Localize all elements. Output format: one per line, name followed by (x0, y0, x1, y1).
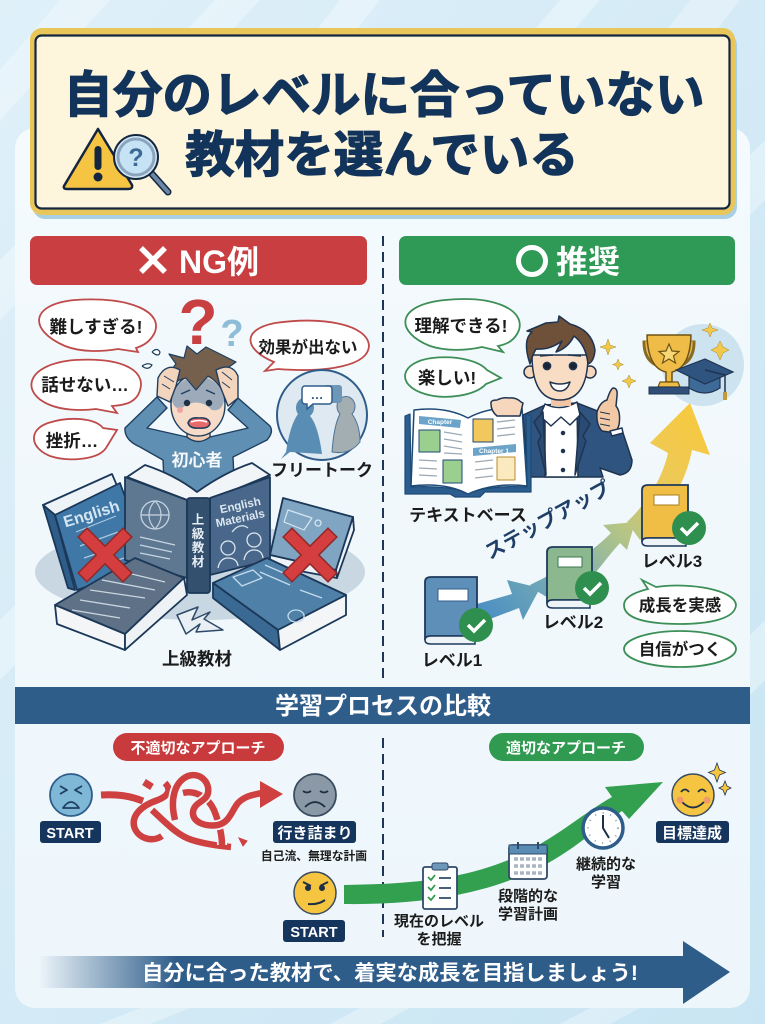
sparkles (708, 763, 731, 795)
book: open textbook: Chapter 1 (479, 448, 509, 455)
label: free talk: フリートーク (271, 461, 373, 480)
book: open textbook: Chapter (428, 419, 453, 426)
step-up arrow (477, 403, 710, 624)
illustration: free talk circle (277, 370, 367, 460)
person: confused beginner (125, 346, 271, 500)
speech bubble: confidence (624, 631, 736, 667)
title text (63, 68, 705, 183)
icon: question marks: ? (178, 286, 218, 358)
label: assess current level: 現在のレベル (394, 913, 484, 930)
book: large open advanced book: 教 (192, 540, 205, 555)
icon: calendar (509, 842, 547, 879)
divider: upper (382, 236, 384, 680)
title text: 自分のレベルに合っていない (63, 68, 705, 123)
label: dead end (273, 821, 356, 843)
pill: inappropriate approach: 不適切なアプローチ (130, 739, 266, 757)
divider: lower (382, 738, 384, 937)
panel: NG heading (30, 236, 367, 285)
speech bubble: understand (405, 299, 520, 352)
label: start: START (46, 826, 94, 842)
call to action arrow (38, 941, 730, 1004)
icon: red cross right (292, 537, 328, 573)
pill: inappropriate approach (113, 733, 284, 761)
speech bubble: confidence: 自信がつく (639, 639, 721, 659)
label: level 2: レベル2 (543, 613, 603, 632)
book: level 3 (642, 485, 706, 546)
face: sad (294, 774, 336, 816)
speech bubble: no effect: 効果が出ない (258, 337, 358, 357)
icon: question marks: ? (220, 313, 244, 355)
book: large open advanced book: 上 (192, 513, 204, 527)
book: large open advanced book: English (219, 496, 262, 516)
speech bubble: frustration (34, 419, 117, 459)
label: dead end: 行き詰まり (277, 825, 353, 842)
pill: appropriate approach: 適切なアプローチ (506, 739, 626, 757)
panel: NG illustration (31, 286, 373, 669)
speech bubble: no effect (250, 321, 369, 371)
caption: self-taught: 自己流、無理な計画 (261, 849, 367, 863)
label: stepwise study plan (498, 887, 558, 923)
shadow under books (35, 524, 365, 620)
pill: appropriate approach (489, 733, 644, 761)
book: large open advanced book: Materials (215, 508, 266, 530)
label: text based: テキストベース (409, 506, 527, 525)
person: confused beginner: 初心者 (172, 451, 222, 470)
speech bubble: too hard (39, 299, 156, 352)
label: start (283, 920, 345, 942)
icon: torn paper (177, 607, 223, 634)
icon: red cross left (87, 537, 123, 573)
label: continuous study: 継続的な (576, 855, 636, 873)
icon: warning and magnifier (64, 129, 168, 192)
label: level 3: レベル3 (642, 552, 702, 571)
label: goal achieved (656, 821, 729, 843)
label: stepwise study plan: 段階的な (498, 887, 558, 905)
panel: recommended heading (399, 236, 735, 285)
label: level 1: レベル1 (422, 651, 482, 670)
book: English left: English (62, 498, 122, 531)
speech bubble: cannot speak (31, 360, 141, 413)
person: smiling learner (523, 316, 632, 477)
label: continuous study: 学習 (591, 873, 621, 891)
speech bubble: understand: 理解できる! (415, 316, 507, 336)
panel: recommended heading: 推奨 (556, 244, 620, 280)
label: advanced materials: 上級教材 (162, 649, 232, 669)
trophy and graduation cap (644, 324, 744, 406)
speech bubble: too hard: 難しすぎる! (50, 317, 142, 337)
panel: NG heading: NG例 (179, 244, 259, 280)
book: English left (43, 474, 150, 590)
face: determined start (294, 872, 336, 914)
book: large open advanced book (125, 463, 270, 593)
book: bottom left flat (55, 558, 187, 650)
label: start: START (290, 925, 338, 941)
section banner: process comparison: 学習プロセスの比較 (275, 693, 491, 720)
panel: recommended illustration (405, 299, 744, 670)
label: step up: ステップアップ (481, 476, 615, 564)
label: goal achieved: 目標達成 (662, 824, 722, 842)
tangled red arrow (101, 775, 283, 847)
title box (30, 28, 737, 219)
speech bubble: cannot speak: 話せない… (41, 375, 129, 395)
green path arrow (344, 782, 663, 904)
book: large open advanced book: 級 (192, 526, 205, 541)
book: bottom right flat (213, 558, 346, 650)
label: stepwise study plan: 学習計画 (498, 905, 558, 923)
book: level 1 (425, 577, 493, 644)
title text: 教材を選んでいる (185, 128, 579, 183)
speech bubble: fun (405, 357, 501, 397)
call to action arrow: 自分に合った教材で、着実な成長を目指しましょう! (142, 961, 638, 985)
face: goal smiling (672, 774, 714, 816)
label: continuous study (576, 855, 636, 891)
face: stressed start (50, 774, 92, 816)
label: assess current level: を把握 (416, 931, 462, 948)
icon: clock (583, 808, 623, 848)
book: large open advanced book: 材 (192, 554, 205, 569)
sparkles (600, 323, 729, 388)
icon: clipboard (423, 863, 457, 909)
label: assess current level (394, 913, 484, 948)
speech bubble: feel growth: 成長を実感 (639, 595, 722, 615)
speech bubble: feel growth (624, 580, 736, 624)
icon: question marks (178, 286, 244, 358)
section banner: process comparison (15, 687, 750, 724)
label: start (40, 821, 101, 843)
illustration: free talk circle: … (310, 387, 324, 402)
book: right back (268, 498, 354, 578)
book: level 2 (547, 547, 609, 608)
speech bubble: frustration: 挫折… (46, 431, 98, 451)
book: open textbook (405, 398, 531, 497)
speech bubble: fun: 楽しい! (418, 368, 476, 388)
icon: warning and magnifier: ? (128, 144, 144, 172)
